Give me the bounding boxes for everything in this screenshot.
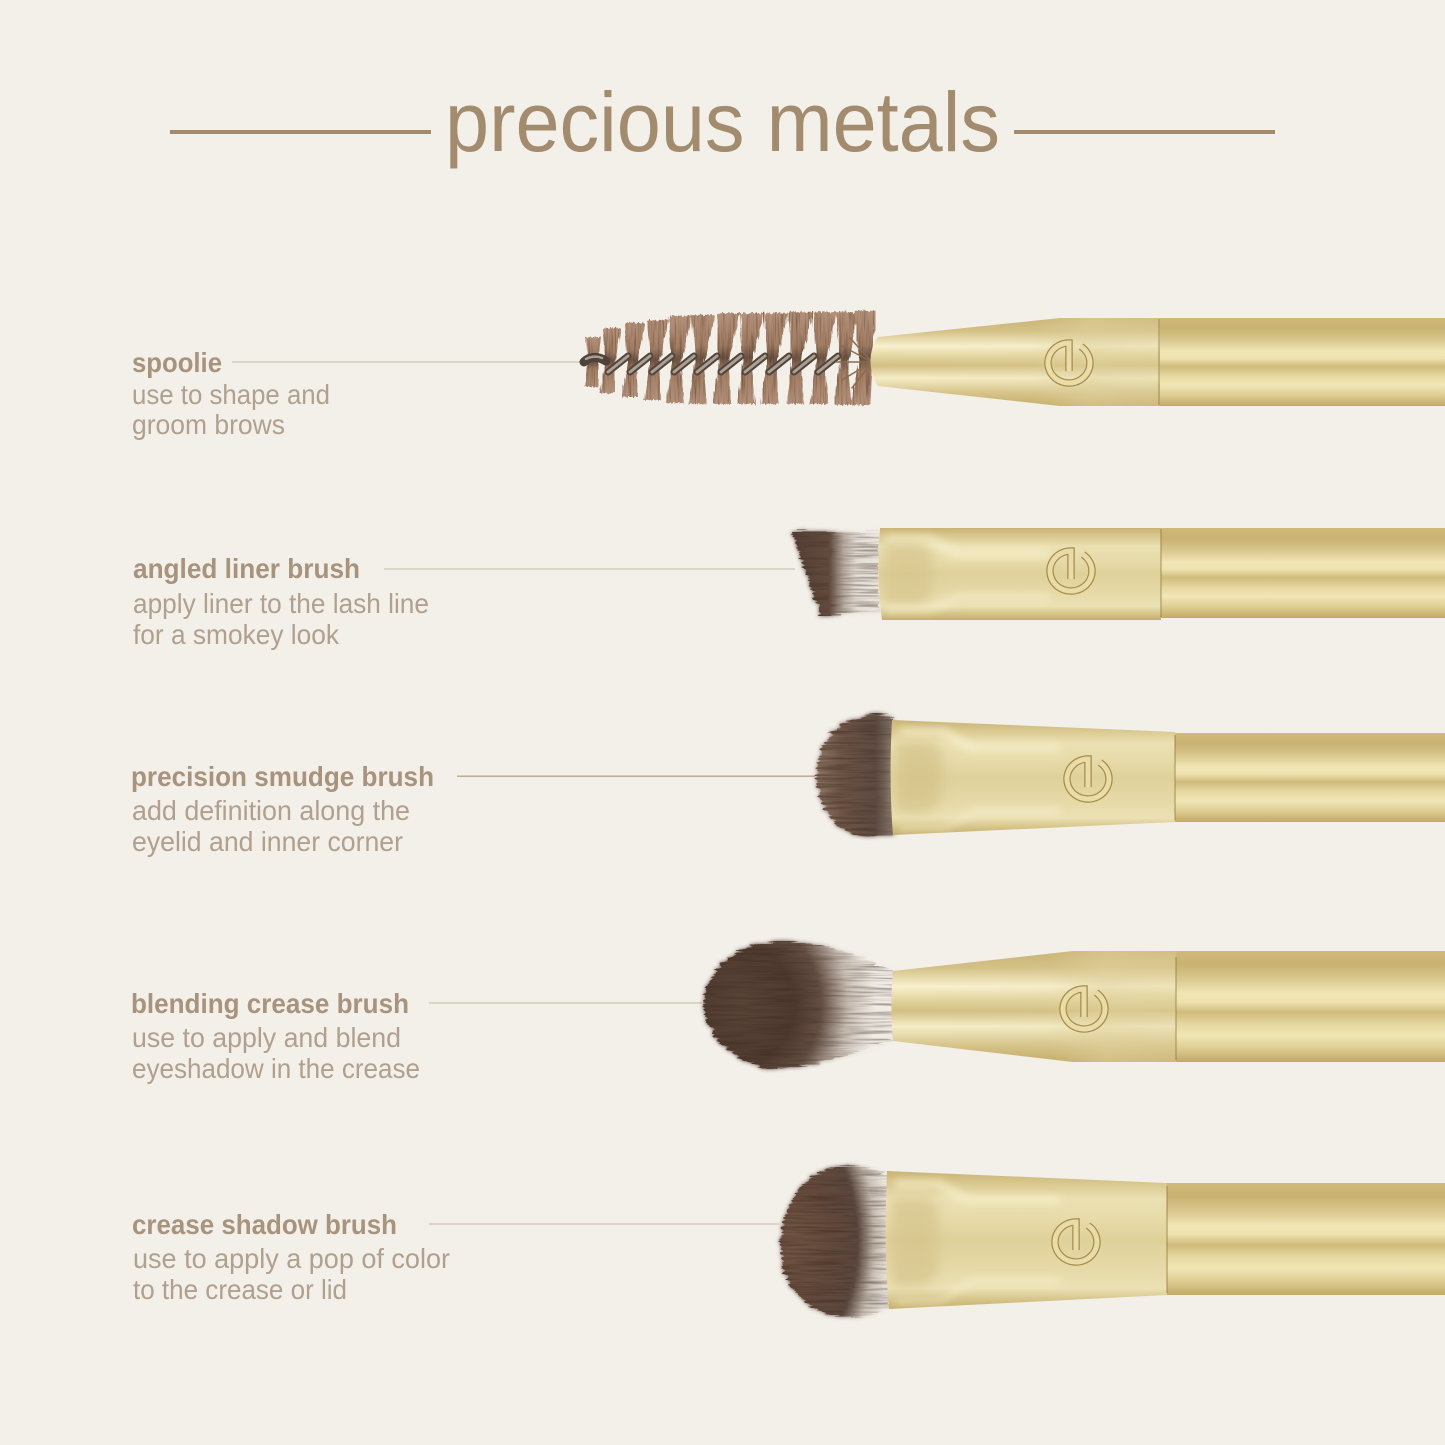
icon: e logo [1067,759,1109,799]
label: spoolie: spoolie [132,347,222,378]
label: angled liner brush: for a smokey look [133,619,340,650]
label: precision smudge brush: precision smudge brush [131,761,434,792]
brush: angled liner [792,528,1445,620]
smudge ferrule highlights [900,728,1060,830]
crease ferrule highlights [895,1180,1060,1304]
spoolie ferrule band fade [870,318,1160,406]
label: blending crease brush: eyeshadow in the crease [132,1053,420,1084]
label: crease shadow brush: use to apply a pop of color [133,1243,450,1274]
label: crease shadow brush [132,1209,779,1305]
liner ferrule facet [884,542,932,606]
label: precision smudge brush [131,761,815,857]
blending handle joint [1175,957,1177,1060]
icon: e logo [1063,989,1105,1029]
label: angled liner brush [133,553,795,650]
icon: e logo [1050,551,1092,591]
blending ferrule [892,951,1176,1062]
brush: precision smudge [818,716,1445,836]
liner bristles [792,532,880,614]
icon: e logo [1048,343,1090,383]
label: blending crease brush [131,988,702,1084]
smudge handle joint [1174,735,1176,820]
spoolie ferrule [870,318,1160,406]
label: spoolie: use to shape and [132,379,330,410]
label: crease shadow brush: crease shadow brush [132,1209,397,1240]
crease ferrule facet [892,1198,938,1286]
title with side rules [170,75,1275,169]
label: angled liner brush: angled liner brush [133,553,360,584]
crease ferrule [886,1171,1167,1309]
brush: spoolie [584,311,1445,406]
liner ferrule [879,528,1161,620]
label: precision smudge brush: eyelid and inner corner [132,826,403,857]
blending handle [1170,951,1445,1062]
crease bristles [781,1166,890,1317]
brush: blending crease [704,942,1445,1069]
crease handle [1164,1183,1445,1295]
label: crease shadow brush: to the crease or lid [133,1274,347,1305]
blending bristles [704,942,895,1069]
smudge ferrule [891,720,1175,835]
label: precision smudge brush: add definition along the [132,795,410,826]
smudge ferrule facet [896,742,942,812]
brush: crease shadow [781,1166,1445,1317]
label: spoolie: groom brows [132,409,285,440]
liner handle joint [1160,529,1162,617]
liner handle [1158,528,1445,618]
liner ferrule highlights [885,535,1050,612]
spoolie bristles [584,311,876,405]
label: spoolie [132,347,582,440]
icon: e logo [1055,1222,1097,1262]
smudge bristles [818,716,894,836]
spoolie twisted wire [584,338,872,388]
smudge handle [1172,733,1445,822]
label: blending crease brush: use to apply and blend [132,1022,401,1053]
spoolie handle [1155,318,1445,406]
title with side rules: precious metals [445,75,1000,169]
label: blending crease brush: blending crease brush [131,988,409,1019]
crease handle joint [1166,1186,1168,1293]
spoolie handle joint [1158,319,1160,405]
blending ferrule band fade [892,951,1176,1062]
label: angled liner brush: apply liner to the lash line [133,588,429,619]
